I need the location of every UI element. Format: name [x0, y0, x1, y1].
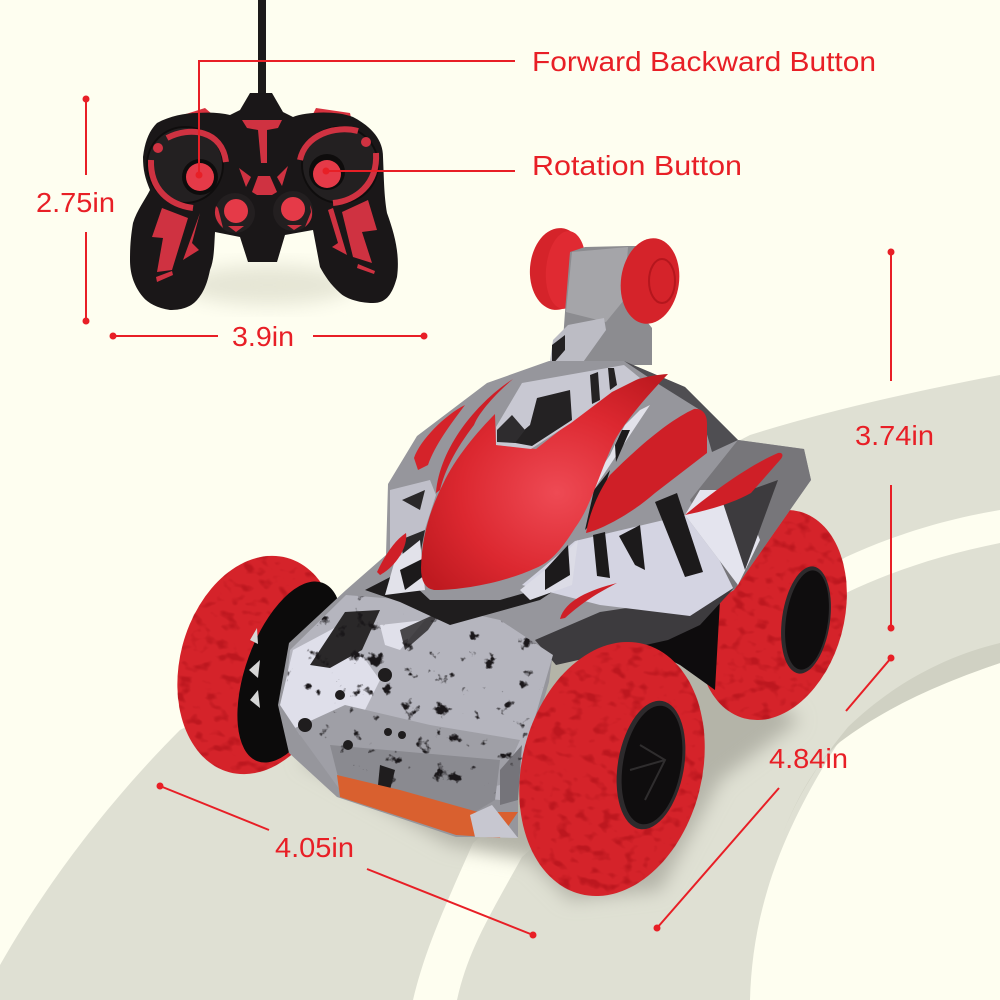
dimension: car width: 4.05in	[275, 832, 354, 863]
dimension: car height	[855, 248, 934, 632]
dimension: car width	[156, 782, 536, 938]
dimension: controller width	[110, 321, 428, 352]
controller shadow	[183, 265, 353, 305]
dark side panel	[535, 588, 734, 665]
dimension: controller height: 2.75in	[36, 187, 115, 218]
dimension: controller width: 3.9in	[232, 321, 294, 352]
upper dark hump	[624, 361, 738, 452]
road edge strip	[783, 643, 1000, 833]
zebra stripes	[385, 405, 811, 616]
under-body shadow	[630, 600, 720, 690]
dimension: car height: 3.74in	[855, 420, 934, 451]
left joystick button	[186, 163, 214, 191]
dimension: car length	[654, 654, 894, 932]
callout line: forward backward button	[196, 61, 515, 178]
controller	[130, 93, 398, 310]
front hood paint	[285, 595, 553, 800]
label: rotation button: Rotation Button	[532, 150, 742, 181]
center nose stripe	[496, 365, 640, 449]
car body	[278, 361, 811, 837]
controller lobes shading	[147, 127, 223, 203]
orange decal	[337, 775, 518, 838]
small buttons	[215, 197, 312, 232]
right red pod	[586, 409, 707, 533]
controller grip markings	[152, 120, 377, 282]
callout line: rotation button	[322, 168, 515, 174]
main red canopy	[421, 374, 668, 590]
road	[0, 375, 1000, 1000]
left red pods	[414, 405, 465, 470]
hood splatter	[285, 595, 553, 800]
car	[154, 226, 869, 916]
controller cord	[258, 0, 266, 96]
right axle wheel	[615, 234, 685, 328]
top axle block	[527, 226, 685, 372]
front right wheel	[493, 622, 731, 916]
back right wheel	[675, 493, 869, 737]
label: forward backward button: Forward Backward Button	[532, 46, 876, 77]
front left wheel	[154, 538, 364, 792]
dimension: controller height	[36, 96, 115, 324]
small red fin	[685, 453, 782, 515]
dimension: car length: 4.84in	[769, 743, 848, 774]
right joystick button	[313, 160, 341, 188]
small left and side fins	[377, 533, 406, 575]
left axle wheel	[527, 226, 589, 312]
car shadow	[300, 640, 800, 900]
